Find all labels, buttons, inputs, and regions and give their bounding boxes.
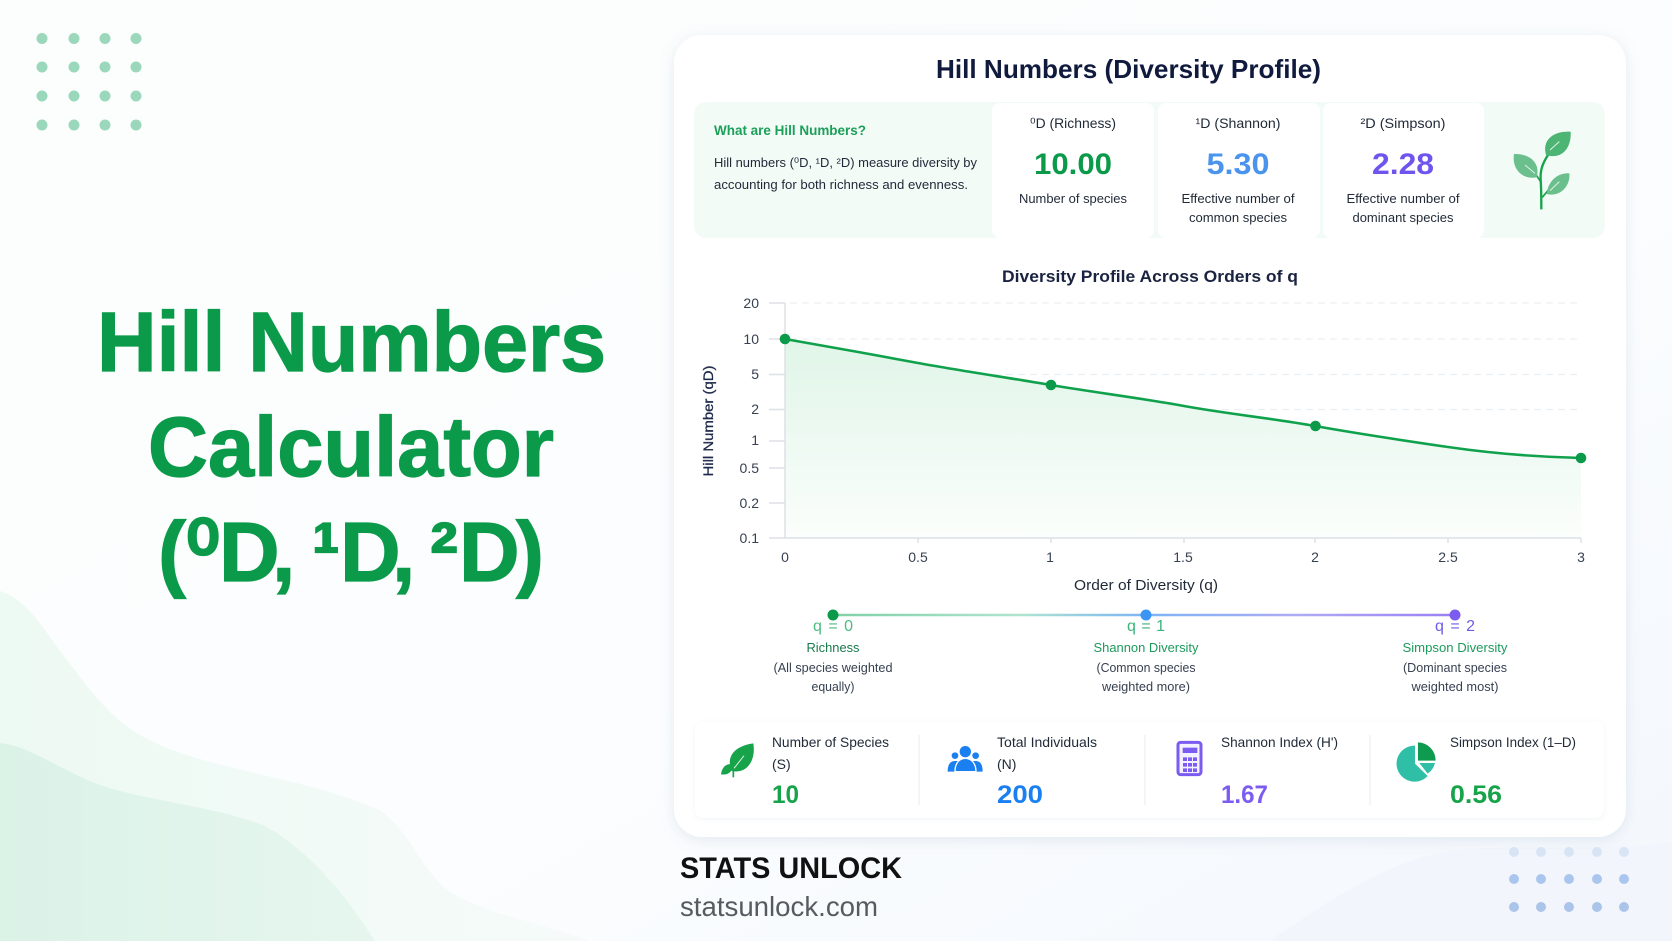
stat card: simpson: 2.28 xyxy=(1372,148,1434,181)
label: q = 0: equally) xyxy=(812,680,854,694)
label: q = 2: q = 2 xyxy=(1435,618,1475,635)
card title: Hill Numbers (Diversity Profile) xyxy=(936,54,1321,84)
y axis labels: 0.1 xyxy=(740,530,759,546)
chart title: Diversity Profile Across Orders of q xyxy=(1002,267,1298,286)
metric: simpson index: 0.56 xyxy=(1450,781,1502,809)
y axis labels xyxy=(740,295,759,546)
stat card: simpson: Effective number of xyxy=(1346,191,1460,206)
metric: simpson index xyxy=(1397,734,1576,809)
panel: calculator card xyxy=(674,35,1626,837)
decorative dots top-left xyxy=(36,33,142,130)
x axis labels: 1.5 xyxy=(1173,549,1193,565)
icon: people xyxy=(948,746,983,772)
x axis labels: 2.5 xyxy=(1438,549,1458,565)
icon: leaf xyxy=(721,743,754,777)
icon: calculator xyxy=(1178,742,1201,775)
explanation text: What are Hill Numbers? xyxy=(714,122,866,138)
chart: diversity profile xyxy=(700,267,1586,594)
stat card: richness: ⁰D (Richness) xyxy=(1030,115,1116,131)
y axis labels: 0.5 xyxy=(740,460,759,476)
data line xyxy=(780,334,1586,463)
x axis labels: 0 xyxy=(781,549,789,565)
metric: number of species: (S) xyxy=(772,756,791,772)
spectrum of q orders xyxy=(774,610,1508,694)
x axis title: Order of Diversity (q) xyxy=(1074,578,1218,594)
stat card: simpson xyxy=(1323,103,1484,238)
label: q = 2 xyxy=(1402,618,1508,694)
explanation text xyxy=(714,122,977,192)
stat card: simpson: ²D (Simpson) xyxy=(1360,115,1446,131)
stat card: shannon: Effective number of xyxy=(1182,191,1295,206)
icon: plant xyxy=(1514,132,1571,209)
main title xyxy=(97,295,606,599)
main title: Hill Numbers xyxy=(97,295,606,389)
decorative dots bottom-right xyxy=(1509,847,1629,912)
metric: shannon index: 1.67 xyxy=(1221,781,1268,809)
label: q = 2: (Dominant species xyxy=(1403,661,1507,675)
brand footer: STATS UNLOCK xyxy=(680,852,902,885)
x axis labels: 2 xyxy=(1311,549,1319,565)
label: q = 1: Shannon Diversity xyxy=(1094,640,1199,655)
explanation text: Hill numbers (⁰D, ¹D, ²D) measure diversity by xyxy=(714,155,977,170)
main title: Calculator xyxy=(148,400,554,494)
label: q = 1: q = 1 xyxy=(1127,618,1165,635)
label: q = 1: weighted more) xyxy=(1101,680,1190,694)
y axis labels: 20 xyxy=(743,295,759,311)
area under curve xyxy=(785,339,1581,538)
metric: total individuals: 200 xyxy=(997,781,1043,809)
stat card: richness: 10.00 xyxy=(1034,148,1112,181)
metric: total individuals: (N) xyxy=(997,756,1016,772)
label: q = 0: (All species weighted xyxy=(774,661,893,675)
metric: shannon index: Shannon Index (H') xyxy=(1221,734,1338,750)
y axis labels: 0.2 xyxy=(740,495,759,511)
explanation text: accounting for both richness and evenness. xyxy=(714,177,968,192)
panel: hill numbers summary xyxy=(694,102,1605,238)
x axis labels xyxy=(781,549,1585,565)
icon: pie chart xyxy=(1397,742,1436,782)
label: q = 1: (Common species xyxy=(1096,661,1196,675)
y axis labels: 5 xyxy=(751,366,759,382)
x axis labels: 1 xyxy=(1046,549,1054,565)
metric: total individuals xyxy=(948,734,1097,809)
stat card: richness: Number of species xyxy=(1019,191,1127,206)
stat card: shannon: ¹D (Shannon) xyxy=(1196,115,1280,131)
main title: (⁰D, ¹D, ²D) xyxy=(158,505,544,599)
metric: total individuals: Total Individuals xyxy=(997,734,1097,750)
metric: simpson index: Simpson Index (1–D) xyxy=(1450,734,1576,750)
panel: summary indices xyxy=(695,722,1604,818)
x axis labels: 3 xyxy=(1577,549,1585,565)
stat card: shannon xyxy=(1158,103,1320,238)
x axis labels: 0.5 xyxy=(908,549,928,565)
y axis labels: 1 xyxy=(751,432,759,448)
y axis title: Hill Number (qD) xyxy=(700,366,716,476)
stat card: shannon: common species xyxy=(1189,210,1287,225)
label: q = 2: weighted most) xyxy=(1410,680,1498,694)
y axis labels: 10 xyxy=(743,331,759,347)
brand footer xyxy=(680,852,902,922)
label: q = 0: Richness xyxy=(806,640,860,655)
label: q = 1 xyxy=(1094,618,1199,694)
metric: number of species: 10 xyxy=(772,781,799,809)
metric: number of species xyxy=(721,734,889,809)
metric: shannon index xyxy=(1178,734,1338,809)
label: q = 2: Simpson Diversity xyxy=(1402,640,1508,655)
stat card: richness xyxy=(992,103,1154,238)
label: q = 0 xyxy=(774,618,893,694)
brand footer: statsunlock.com xyxy=(680,891,878,922)
stat card: shannon: 5.30 xyxy=(1206,148,1270,181)
y axis labels: 2 xyxy=(751,401,759,417)
label: q = 0: q = 0 xyxy=(813,618,853,635)
metric: number of species: Number of Species xyxy=(772,734,889,750)
stat card: simpson: dominant species xyxy=(1352,210,1454,225)
